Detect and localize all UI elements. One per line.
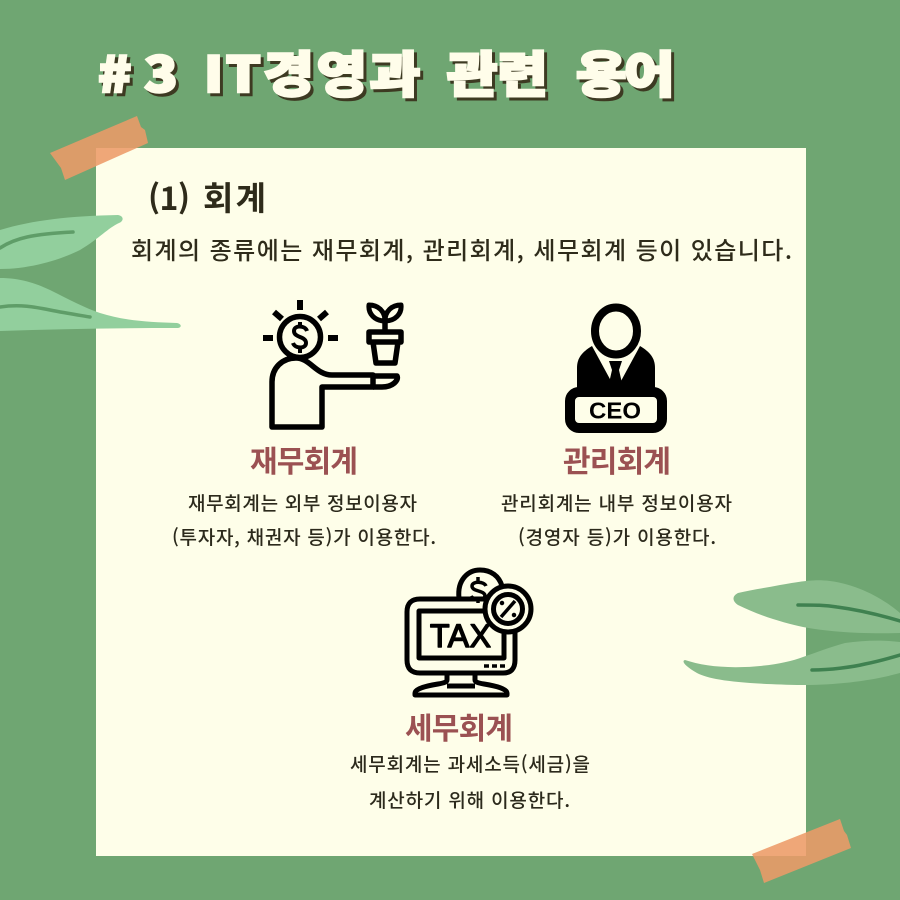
text: management accounting description: (경영자 등)가 이용한다. (518, 523, 716, 550)
heading: tax accounting: 세무회계 (405, 704, 513, 748)
tape: top left (50, 116, 148, 180)
text: financial accounting description: (투자자, 채권자 등)가 이용한다. (172, 523, 436, 550)
panel: content card (96, 148, 806, 856)
title: IT경영과 (204, 35, 420, 106)
intro sentence: 회계의 종류에는 재무회계, 관리회계, 세무회계 등이 있습니다. (131, 231, 792, 266)
leaves: right (684, 580, 900, 685)
text: tax accounting description (350, 750, 590, 813)
icon: CEO (570, 308, 662, 428)
tape: bottom right (752, 819, 851, 883)
heading: financial accounting: 재무회계 (250, 437, 358, 481)
text: tax accounting description: 세무회계는 과세소득(세금)을 (350, 750, 590, 777)
icon: tax monitor (407, 570, 531, 695)
icon: tax monitor: TAX (430, 618, 491, 654)
section heading: (1) (148, 174, 190, 220)
icon: person with coin head and plant (263, 300, 401, 427)
title (98, 35, 678, 109)
heading: management accounting: 관리회계 (563, 437, 671, 481)
title: 관련 (450, 38, 551, 109)
title: 용어 (579, 38, 678, 109)
title: 용어 (576, 35, 675, 106)
text: financial accounting description (172, 489, 436, 550)
title: #3 (98, 35, 178, 106)
title: #3 (101, 38, 181, 109)
text: management accounting description (501, 489, 733, 550)
section heading: 회계 (203, 172, 266, 220)
leaves: left (0, 215, 181, 331)
title: IT경영과 (207, 38, 423, 109)
text: financial accounting description: 재무회계는 외부 정보이용자 (188, 489, 418, 516)
title: 관련 (447, 35, 548, 106)
section heading (148, 172, 266, 220)
text: tax accounting description: 계산하기 위해 이용한다. (369, 786, 570, 813)
text: management accounting description: 관리회계는 내부 정보이용자 (501, 489, 733, 516)
icon: CEO: CEO (589, 398, 641, 424)
